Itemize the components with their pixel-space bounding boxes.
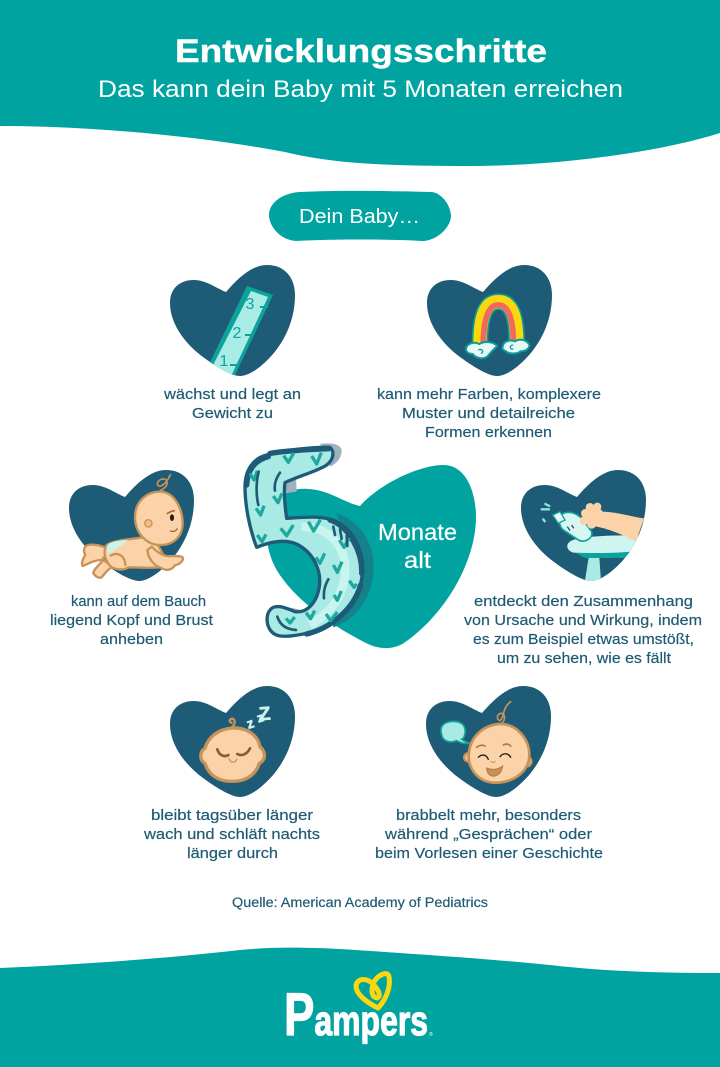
icon: ruler in heart: 2 bbox=[233, 325, 242, 342]
panel: centre 5 months bbox=[245, 443, 476, 648]
icon: ruler in heart bbox=[170, 265, 295, 376]
panel: sleep bbox=[143, 686, 320, 862]
caption: colours bbox=[377, 386, 601, 441]
panel: colours bbox=[377, 265, 601, 441]
header band bbox=[0, 0, 720, 166]
icon: sleeping baby bbox=[170, 686, 295, 797]
pill: Dein Baby bbox=[269, 191, 451, 241]
caption: babbling: brabbelt mehr, besonders bbox=[396, 807, 581, 824]
icon: zzz: z bbox=[255, 709, 266, 726]
caption: babbling bbox=[375, 807, 603, 862]
icon: hand tipping bottle bbox=[521, 470, 646, 587]
caption: cause and effect: um zu sehen, wie es fällt bbox=[497, 650, 672, 667]
footer band bbox=[0, 948, 720, 1067]
caption: sleep bbox=[143, 807, 320, 862]
subtitle: Das kann dein Baby mit 5 Monaten erreichen bbox=[98, 76, 623, 103]
source note: Quelle: American Academy of Pediatrics bbox=[232, 895, 488, 910]
caption: cause and effect bbox=[464, 593, 702, 667]
caption: sleep: bleibt tagsüber länger bbox=[151, 807, 313, 824]
icon: zzz bbox=[244, 704, 272, 732]
icon: ruler in heart: 3 bbox=[246, 296, 255, 313]
caption: tummy time: kann auf dem Bauch bbox=[71, 593, 206, 610]
icon: laughing baby with speech bubble bbox=[426, 686, 551, 797]
pill: Dein Baby: Dein Baby… bbox=[299, 206, 420, 228]
logo heart bbox=[356, 974, 389, 1008]
caption: colours: Formen erkennen bbox=[425, 424, 552, 441]
caption: tummy time bbox=[50, 593, 214, 648]
panel: babbling bbox=[375, 686, 603, 862]
icon: baby on tummy bbox=[69, 470, 194, 581]
label: Monate alt: alt bbox=[404, 547, 432, 573]
cloud left bbox=[466, 342, 497, 358]
caption: babbling: beim Vorlesen einer Geschichte bbox=[375, 845, 603, 862]
cloud right bbox=[502, 340, 530, 354]
icon: rainbow in heart bbox=[427, 265, 552, 376]
icon: ruler in heart: 1 bbox=[220, 353, 229, 370]
caption: cause and effect: von Ursache und Wirkung, indem bbox=[464, 612, 702, 629]
caption: cause and effect: es zum Beispiel etwas umstößt, bbox=[473, 631, 694, 648]
caption: tummy time: anheben bbox=[100, 631, 163, 648]
caption: colours: kann mehr Farben, komplexere bbox=[377, 386, 601, 403]
logo: Pampers: ® bbox=[429, 1031, 433, 1038]
label: Monate alt: Monate bbox=[378, 519, 457, 545]
centre heart bbox=[267, 465, 476, 648]
caption: growth bbox=[163, 386, 301, 422]
logo: Pampers: Pampers bbox=[284, 981, 428, 1048]
panel: growth bbox=[163, 265, 301, 422]
caption: growth: wächst und legt an bbox=[163, 386, 301, 403]
caption: cause and effect: entdeckt den Zusammenhang bbox=[474, 593, 693, 610]
icon: zzz: Z bbox=[258, 704, 272, 725]
caption: tummy time: liegend Kopf und Brust bbox=[50, 612, 214, 629]
title: Entwicklungsschritte bbox=[175, 33, 547, 69]
icon: zzz: z bbox=[244, 715, 256, 732]
caption: babbling: während „Gesprächen“ oder bbox=[384, 826, 592, 843]
panel: cause and effect bbox=[464, 470, 702, 667]
caption: sleep: wach und schläft nachts bbox=[143, 826, 320, 843]
panel: tummy time bbox=[50, 470, 214, 648]
caption: sleep: länger durch bbox=[187, 845, 278, 862]
caption: growth: Gewicht zu bbox=[192, 405, 273, 422]
label: Monate alt bbox=[378, 519, 457, 573]
numeral 5 bbox=[245, 443, 374, 636]
caption: colours: Muster und detailreiche bbox=[402, 405, 575, 422]
